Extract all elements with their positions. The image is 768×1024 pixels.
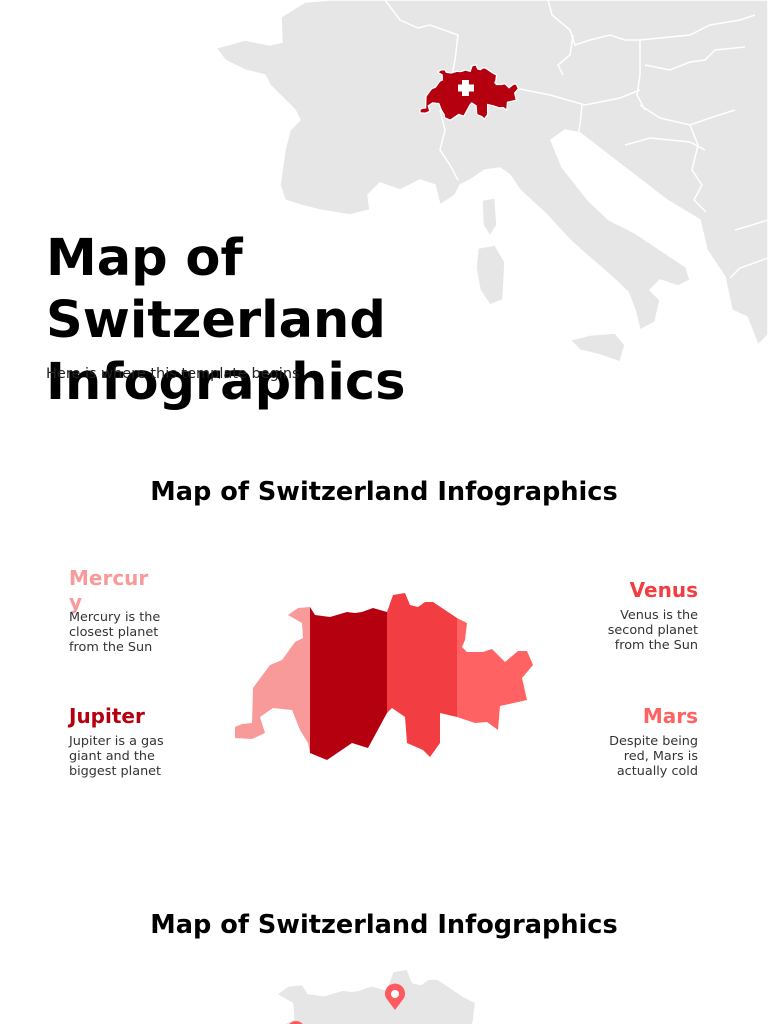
label: Jupiter: Jupiter is a gas (69, 734, 164, 749)
label: Jupiter: giant and the (69, 749, 155, 764)
label: Mars: red, Mars is (624, 749, 698, 764)
heading 2: Map of Switzerland Infographics (150, 910, 618, 940)
label: Mars: Despite being (609, 734, 698, 749)
map: gray Switzerland with pins (278, 970, 475, 1024)
heading 1: Map of Switzerland Infographics (150, 477, 618, 507)
label: Mars (609, 704, 698, 779)
title (46, 229, 405, 412)
title: Map of (46, 229, 243, 288)
label: Jupiter: biggest planet (69, 764, 161, 779)
label: Venus: from the Sun (615, 638, 698, 653)
label: Venus (608, 578, 698, 653)
label: Mercury (69, 566, 160, 655)
icon: pin partial (287, 1021, 305, 1024)
label: Venus: Venus (630, 578, 698, 602)
label: Mars: actually cold (617, 764, 698, 779)
label: Mercury: Mercury is the (69, 610, 160, 625)
subtitle: Here is where this template begins (46, 366, 300, 382)
label: Venus: Venus is the (620, 608, 698, 623)
label: Jupiter (68, 704, 164, 779)
label: Jupiter: Jupiter (69, 704, 145, 728)
title: Infographics (46, 353, 405, 412)
icon: pin (385, 984, 405, 1010)
label: Mars: Mars (643, 704, 698, 728)
label: Mercury: closest planet (69, 625, 158, 640)
label: Mercury: from the Sun (69, 640, 152, 655)
icon: Switzerland highlighted with flag cross (420, 65, 518, 120)
label: Mercury: Mercury (69, 566, 148, 614)
background map of Europe (218, 0, 768, 361)
map: Switzerland colored regions (235, 593, 533, 760)
label: Venus: second planet (608, 623, 698, 638)
title: Switzerland (46, 291, 386, 350)
